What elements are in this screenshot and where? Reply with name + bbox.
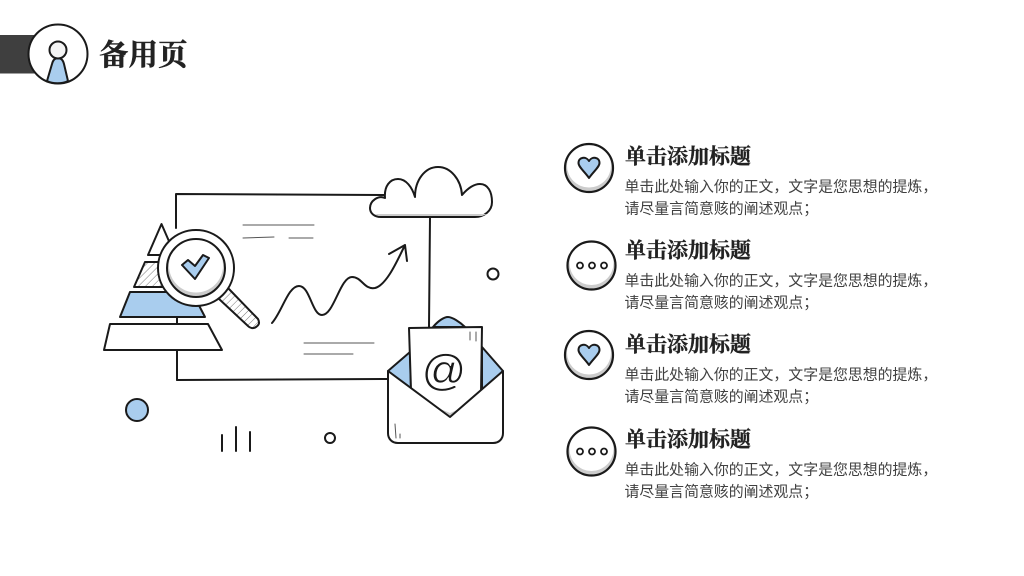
body text [624, 178, 937, 218]
list item 2 [568, 238, 937, 312]
body text [624, 462, 937, 500]
dot: outlined bottom [325, 433, 335, 443]
icon: person avatar [28, 24, 88, 84]
heading: 单击添加标题 [625, 332, 751, 356]
icon: heart [565, 330, 613, 379]
body text [624, 366, 937, 406]
list item 4 [568, 427, 937, 500]
list item 3 [565, 330, 937, 406]
icon: cloud [370, 167, 492, 217]
body text: 请尽量言简意赅的阐述观点； [624, 200, 818, 218]
pyramid [104, 224, 222, 380]
body text: 请尽量言简意赅的阐述观点； [624, 294, 818, 312]
body text [624, 272, 937, 312]
body text: 请尽量言简意赅的阐述观点； [624, 482, 818, 500]
dot: blue [126, 399, 148, 421]
body text: 单击此处输入你的正文，文字是您思想的提炼， [624, 366, 937, 384]
frame: chart board [176, 194, 430, 380]
icon: dots [568, 427, 616, 476]
body text: 单击此处输入你的正文，文字是您思想的提炼， [624, 272, 937, 290]
body text: 单击此处输入你的正文，文字是您思想的提炼， [624, 178, 937, 196]
at sign: @ [422, 346, 466, 395]
list item 1 [565, 144, 937, 218]
icon: magnifying glass [158, 230, 259, 328]
dot: outlined right [488, 268, 498, 280]
tick marks [222, 427, 250, 451]
heading: 单击添加标题 [625, 144, 751, 168]
heading: 单击添加标题 [625, 428, 751, 452]
title: 备用页 [99, 39, 188, 72]
body text: 请尽量言简意赅的阐述观点； [624, 388, 818, 406]
icon: envelope [388, 317, 503, 443]
illustration [104, 167, 503, 451]
header bar [0, 35, 36, 74]
trend arrow [272, 245, 407, 323]
heading: 单击添加标题 [625, 238, 751, 262]
body text: 单击此处输入你的正文，文字是您思想的提炼， [624, 462, 937, 478]
text lines [243, 225, 374, 354]
icon: dots [568, 241, 616, 290]
icon: heart [565, 144, 613, 192]
